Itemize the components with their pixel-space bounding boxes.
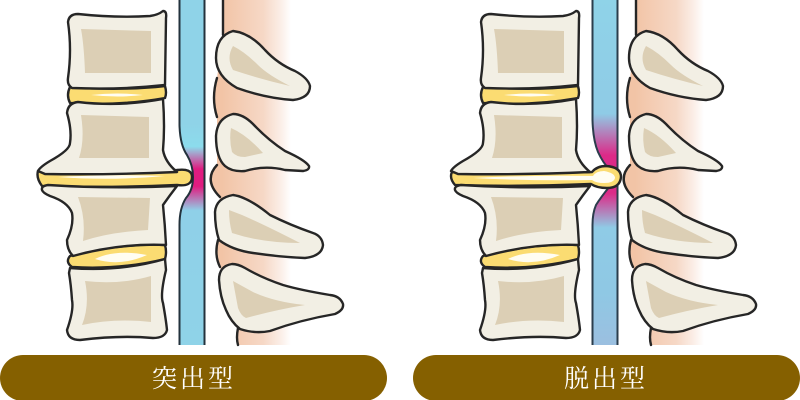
label pill: extrusion: 脱出型 <box>564 365 648 393</box>
spinal canal compressed by disc <box>592 0 618 345</box>
vertebra 2 <box>451 99 590 174</box>
disc 1 <box>481 86 579 104</box>
panel: extrusion type <box>451 0 756 345</box>
spinous process 4 <box>219 264 343 332</box>
vertebra 4 <box>67 259 167 340</box>
vertebra 4 <box>480 259 580 340</box>
spinous process 3 <box>215 195 323 258</box>
spinous process 3 <box>628 195 736 258</box>
soft tissue behind spinous processes <box>211 0 291 345</box>
vertebra 1 <box>481 11 579 89</box>
spinous process 1 <box>216 31 310 100</box>
vertebra 3 <box>455 185 590 256</box>
spinous process 4 <box>632 264 756 332</box>
disc 3 <box>68 245 166 268</box>
label pill: protrusion: 突出型 <box>152 365 236 393</box>
spinous process 1 <box>629 31 723 100</box>
spinous process 2 <box>629 114 722 171</box>
spinous process 2 <box>216 114 309 171</box>
label pill: protrusion <box>0 355 387 400</box>
vertebra 2 <box>38 99 177 174</box>
bulging disc 2 <box>38 170 192 187</box>
vertebra 3 <box>42 185 177 256</box>
spinal canal with bulge <box>180 0 204 345</box>
soft tissue behind spinous processes <box>624 0 704 345</box>
label pill: extrusion <box>413 355 800 400</box>
panel: protrusion type <box>38 0 343 345</box>
disc 1 <box>68 86 166 104</box>
herniated disc 2 <box>451 166 621 188</box>
disc 3 <box>481 245 579 268</box>
vertebra 1 <box>68 11 166 89</box>
